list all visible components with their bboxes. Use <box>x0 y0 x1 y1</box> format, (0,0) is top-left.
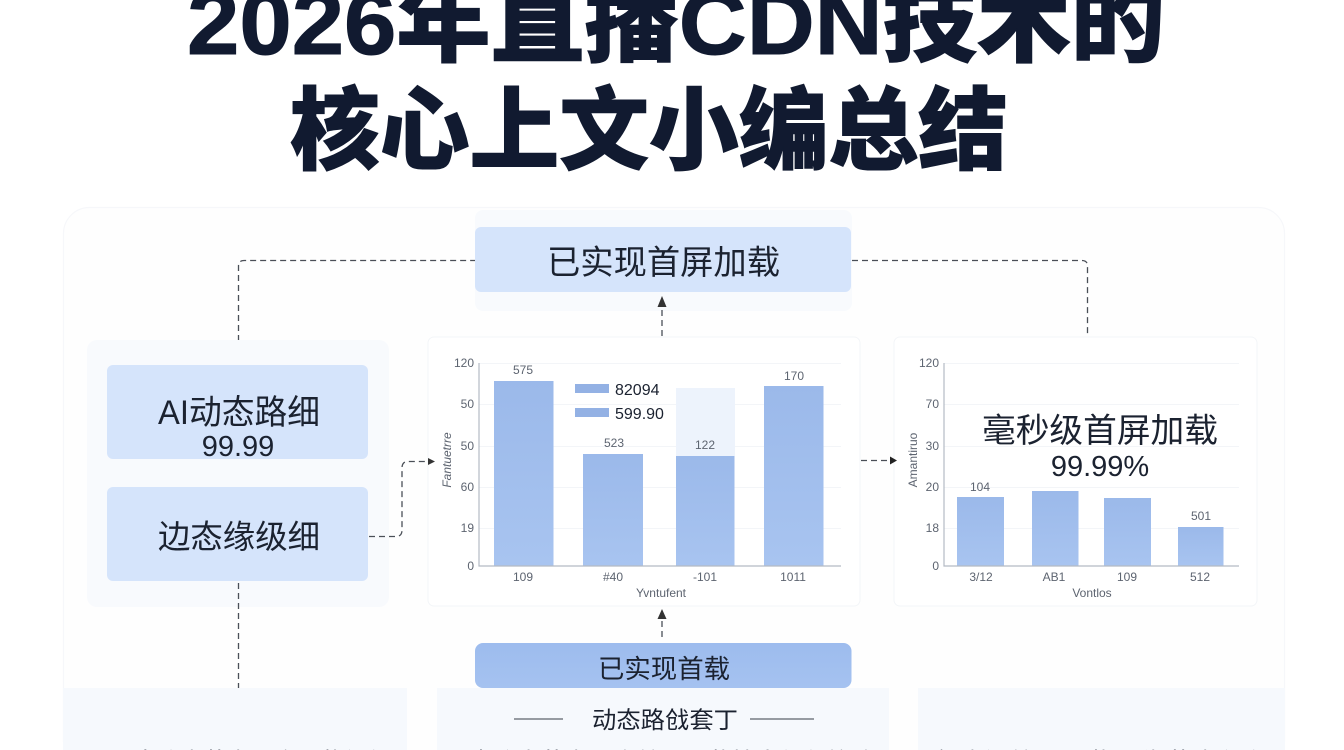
y axis labels: 0 <box>467 559 474 573</box>
arrow: middle chart to right chart <box>861 456 897 464</box>
panel: top result box: 已实现首屏加载 <box>547 245 780 282</box>
y axis labels: 120 <box>919 356 939 370</box>
connector: left column to top box <box>238 260 475 361</box>
y axis labels: 19 <box>461 521 474 535</box>
legend <box>575 382 664 423</box>
box: AI dynamic routing: 99.99 <box>202 431 274 463</box>
bar value labels: 104 <box>970 480 990 494</box>
y axis labels: 50 <box>461 397 474 411</box>
box: edge node <box>107 487 368 581</box>
chart callout <box>982 412 1218 483</box>
y axis labels <box>919 356 939 573</box>
bar value labels: 575 <box>513 363 533 377</box>
panel: outer diagram frame <box>64 208 1284 750</box>
connector: top box to right chart <box>852 260 1088 335</box>
box: AI dynamic routing <box>107 365 368 463</box>
x axis labels: #40 <box>603 570 623 584</box>
bars <box>957 491 1224 566</box>
arrow: left column to middle chart <box>369 458 435 536</box>
button: bottom box: 已实现首载 <box>598 654 730 684</box>
axis titles: Yvntufent <box>636 586 687 600</box>
y axis labels: 20 <box>926 480 939 494</box>
panel: top result box <box>475 210 852 311</box>
box: edge node: 边态缘级细 <box>158 519 320 555</box>
legend: 82094 <box>615 382 660 399</box>
chart callout: 99.99% <box>1051 451 1149 483</box>
title: 核心上文小编总结 <box>290 82 1008 182</box>
bar value labels: 501 <box>1191 509 1211 523</box>
x axis labels: 3/12 <box>969 570 993 584</box>
legend: 599.90 <box>615 406 664 423</box>
subheading: 动态路戗套丁 <box>592 707 738 733</box>
clipped text row at page bottom <box>110 749 1270 750</box>
y axis labels: 60 <box>461 480 474 494</box>
axis titles: Amantiruo <box>906 432 920 487</box>
axis titles: Fantuetrre <box>440 432 454 488</box>
y axis labels: 120 <box>454 356 474 370</box>
bar value labels: 170 <box>784 369 804 383</box>
title <box>187 0 1165 182</box>
y axis labels <box>454 356 474 573</box>
x axis labels: 109 <box>513 570 533 584</box>
panel: bottom column middle <box>437 688 889 750</box>
button: bottom box <box>475 643 852 688</box>
x axis labels <box>513 570 806 584</box>
axis titles: Vontlos <box>1072 586 1112 600</box>
y axis labels: 0 <box>932 559 939 573</box>
axis titles <box>440 432 687 600</box>
bar value labels <box>513 363 804 452</box>
panel: bottom column right <box>918 688 1285 750</box>
bar value labels: 122 <box>695 438 715 452</box>
bars <box>494 381 824 566</box>
pale background bar <box>676 388 735 456</box>
connector: left column down <box>238 583 240 688</box>
arrow: middle chart to top box <box>658 296 666 336</box>
arrow: bottom button to middle chart <box>658 609 666 640</box>
bar value labels <box>970 480 1211 523</box>
bar value labels: 523 <box>604 436 624 450</box>
x axis labels: AB1 <box>1043 570 1066 584</box>
chart callout: 毫秒级首屏加载 <box>982 412 1218 450</box>
x axis labels: 1011 <box>780 570 806 584</box>
panel: bottom column left <box>63 688 407 750</box>
x axis labels <box>969 570 1210 584</box>
x axis labels: 512 <box>1190 570 1210 584</box>
panel: middle bar chart <box>428 337 860 606</box>
axis titles <box>906 432 1112 600</box>
panel: right bar chart <box>894 337 1257 606</box>
y axis labels: 50 <box>461 439 474 453</box>
x axis labels: -101 <box>693 570 717 584</box>
panel: left column <box>87 340 389 607</box>
box: AI dynamic routing: AI动态路细 <box>158 394 320 432</box>
y axis labels: 30 <box>926 439 939 453</box>
y axis labels: 18 <box>926 521 939 535</box>
x axis labels: 109 <box>1117 570 1137 584</box>
y axis labels: 70 <box>926 397 939 411</box>
